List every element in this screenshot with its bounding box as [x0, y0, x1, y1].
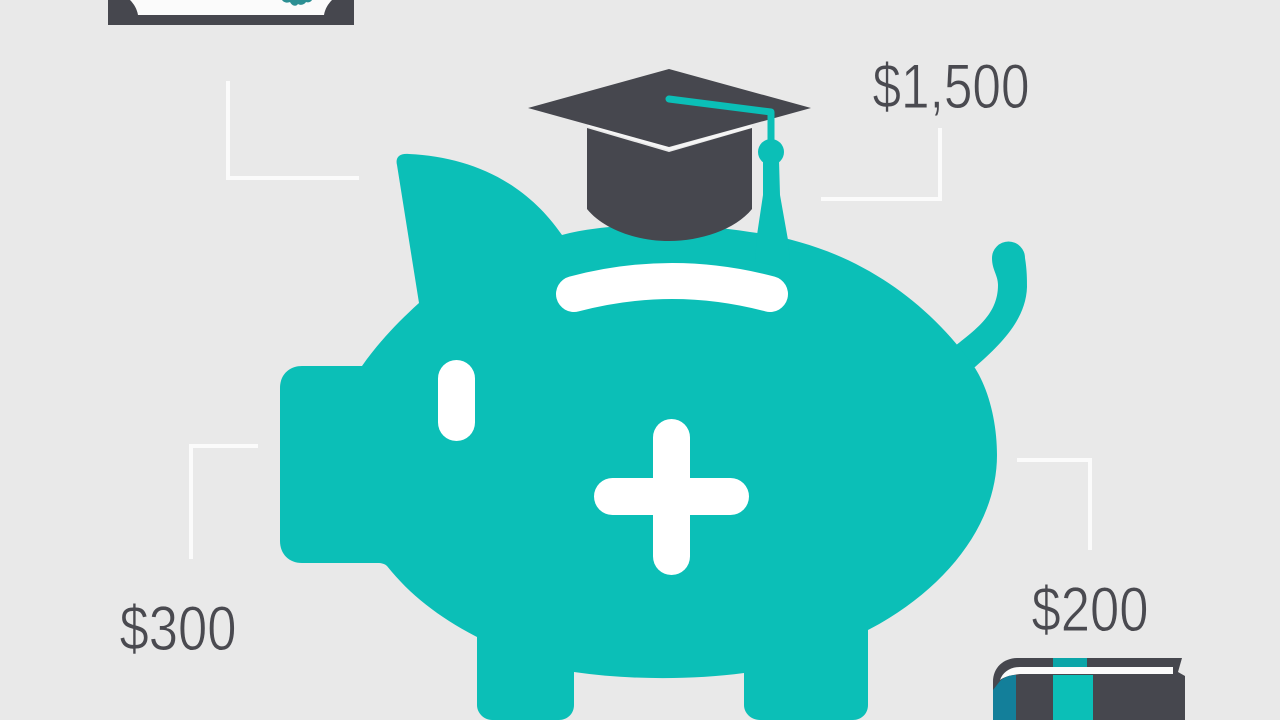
connector: right	[1017, 460, 1090, 550]
coin slot	[574, 281, 770, 294]
label: $1,500: $1,500	[872, 52, 1030, 122]
cap base	[587, 128, 752, 241]
connector: top right	[821, 128, 940, 199]
icon: diploma frame	[108, 0, 354, 25]
label: $200: $200	[1032, 575, 1148, 645]
pig eye	[438, 360, 475, 441]
connector: left	[191, 446, 258, 559]
connector: top left	[228, 81, 359, 178]
piggy bank	[280, 154, 1027, 720]
cap board	[528, 69, 811, 147]
pig tail	[950, 242, 1027, 375]
plus sign	[594, 419, 749, 575]
pig body	[280, 154, 997, 720]
icon: graduation cap	[528, 69, 811, 262]
tassel	[669, 99, 790, 262]
icon: book	[993, 658, 1185, 720]
cap edge highlight	[588, 125, 752, 149]
label: $300: $300	[120, 594, 236, 664]
